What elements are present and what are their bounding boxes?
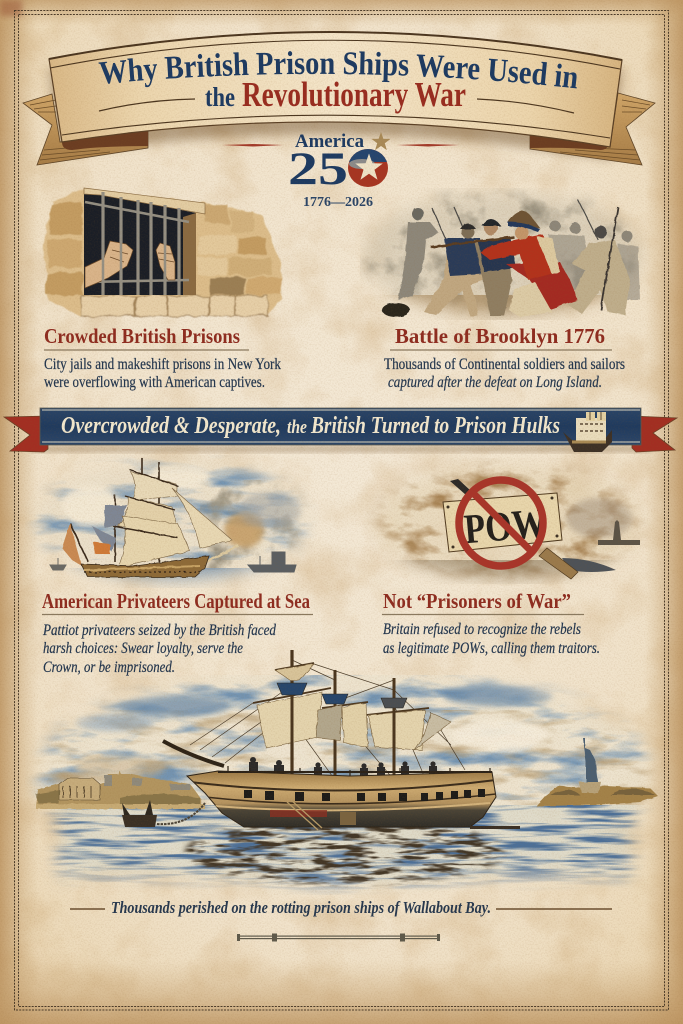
- fallen figure: [382, 303, 410, 317]
- right ribbon tail: [530, 93, 655, 165]
- illustration: battle scene: [360, 188, 650, 320]
- America 250 logo: [222, 131, 459, 210]
- America 250 logo: 1776—2026: [303, 195, 373, 210]
- rowing boat with chain: [122, 800, 205, 827]
- background soldiers: [398, 208, 640, 300]
- banner text: [61, 413, 560, 439]
- description: City jails and makeshift prisons in New York: [44, 356, 281, 373]
- panel: Battle of Brooklyn: [360, 188, 650, 391]
- banner text: the: [287, 417, 307, 438]
- stone lintel: [84, 188, 205, 214]
- POW text: POW: [462, 500, 548, 553]
- icon: gold star: [371, 132, 391, 150]
- description: were overflowing with American captives.: [44, 374, 265, 391]
- title heading: the: [205, 82, 235, 112]
- deck figures: [249, 757, 437, 778]
- wooden handle: [539, 548, 578, 579]
- tattered sails: [257, 664, 451, 750]
- heading: American Privateers Captured at Sea: [42, 589, 310, 613]
- ornamental divider: [237, 934, 440, 942]
- illustration: POW sign crossed out: [365, 458, 650, 586]
- description: Crown, or be imprisoned.: [43, 659, 175, 676]
- prisoner hands: [85, 241, 133, 288]
- statue: [583, 738, 598, 782]
- pedestal: [579, 782, 601, 793]
- distant city skyline: [36, 770, 205, 809]
- heading: Crowded British Prisons: [44, 324, 240, 348]
- flags: [62, 523, 82, 566]
- description: Britain refused to recognize the rebels: [383, 621, 581, 638]
- tan soldier on the right: [595, 226, 607, 238]
- yards: [113, 470, 178, 538]
- scroll body: [49, 32, 622, 147]
- title scroll banner: [22, 31, 656, 166]
- description: Pattiot privateers seized by the British faced: [42, 622, 276, 639]
- panel: crowded British prisons: [44, 188, 282, 391]
- ship hull: [187, 766, 496, 830]
- parchment sign: [443, 493, 562, 552]
- dark window opening: [84, 190, 196, 295]
- masts and yards: [253, 650, 429, 782]
- red-coated soldier: [506, 262, 578, 310]
- description: [44, 356, 281, 391]
- banner text: British Turned to Prison Hulks: [310, 413, 560, 439]
- pen nib: [450, 479, 471, 495]
- musket: [431, 237, 514, 247]
- hull: [81, 556, 209, 577]
- navy band: [40, 408, 641, 445]
- iron bars: [85, 192, 189, 295]
- masts: [70, 458, 159, 562]
- description: harsh choices: Swear loyalty, serve the: [43, 640, 243, 657]
- description: [384, 356, 625, 391]
- divider banner: [4, 408, 677, 452]
- right red ribbon: [632, 416, 677, 452]
- illustration: privateer ship at sea: [25, 455, 320, 588]
- sky and water wash: [25, 675, 665, 895]
- blue soldier two: [474, 240, 512, 316]
- prohibition symbol: [459, 480, 543, 566]
- right scroll curl: [530, 133, 610, 150]
- icon: small ship: [563, 412, 612, 452]
- description: Thousands of Continental soldiers and sailors: [384, 356, 625, 373]
- distant lighthouse: [598, 520, 640, 545]
- description: [383, 621, 600, 657]
- dark shore shadow: [562, 558, 616, 572]
- bowsprit: [163, 741, 224, 766]
- America 250 logo: America: [295, 131, 364, 152]
- rail: [218, 771, 492, 773]
- heading: Battle of Brooklyn 1776: [395, 324, 605, 348]
- left red ribbon: [4, 416, 48, 452]
- description: [42, 622, 276, 676]
- rigging lines: [190, 660, 465, 780]
- panel: American privateers: [25, 455, 320, 676]
- panel: not prisoners of war: [365, 458, 650, 657]
- icon: star circle: [348, 149, 388, 187]
- heading: Not “Prisoners of War”: [383, 589, 571, 613]
- cream sails: [131, 472, 178, 500]
- illustration: barred prison window: [44, 188, 282, 316]
- description: captured after the defeat on Long Island.: [388, 374, 602, 391]
- title heading: [98, 51, 577, 114]
- gun port windows: [244, 789, 485, 801]
- Liberty island: [536, 738, 658, 806]
- bowsprit: [205, 545, 238, 563]
- illustration: prison hulk in Wallabout Bay: [25, 650, 665, 895]
- red paint patches: [270, 810, 327, 817]
- left scroll curl: [62, 131, 148, 150]
- small boat: [50, 558, 66, 570]
- America 250 logo: 25: [288, 143, 348, 195]
- banner text: Overcrowded & Desperate,: [61, 413, 281, 439]
- title heading: Revolutionary War: [242, 75, 466, 114]
- description: as legitimate POWs, calling them traitors.: [383, 640, 600, 657]
- distant enemy ship: [248, 552, 296, 572]
- caption: Thousands perished on the rotting prison ships of Wallabout Bay.: [111, 898, 491, 917]
- left ribbon tail: [23, 94, 148, 165]
- floating debris: [470, 826, 520, 829]
- blue soldier one: [424, 238, 484, 316]
- boarding ladder: [287, 800, 322, 830]
- title heading: Why British Prison Ships Were Used in: [98, 51, 577, 88]
- grey rear sail: [92, 505, 127, 552]
- crow's nests: [277, 683, 407, 708]
